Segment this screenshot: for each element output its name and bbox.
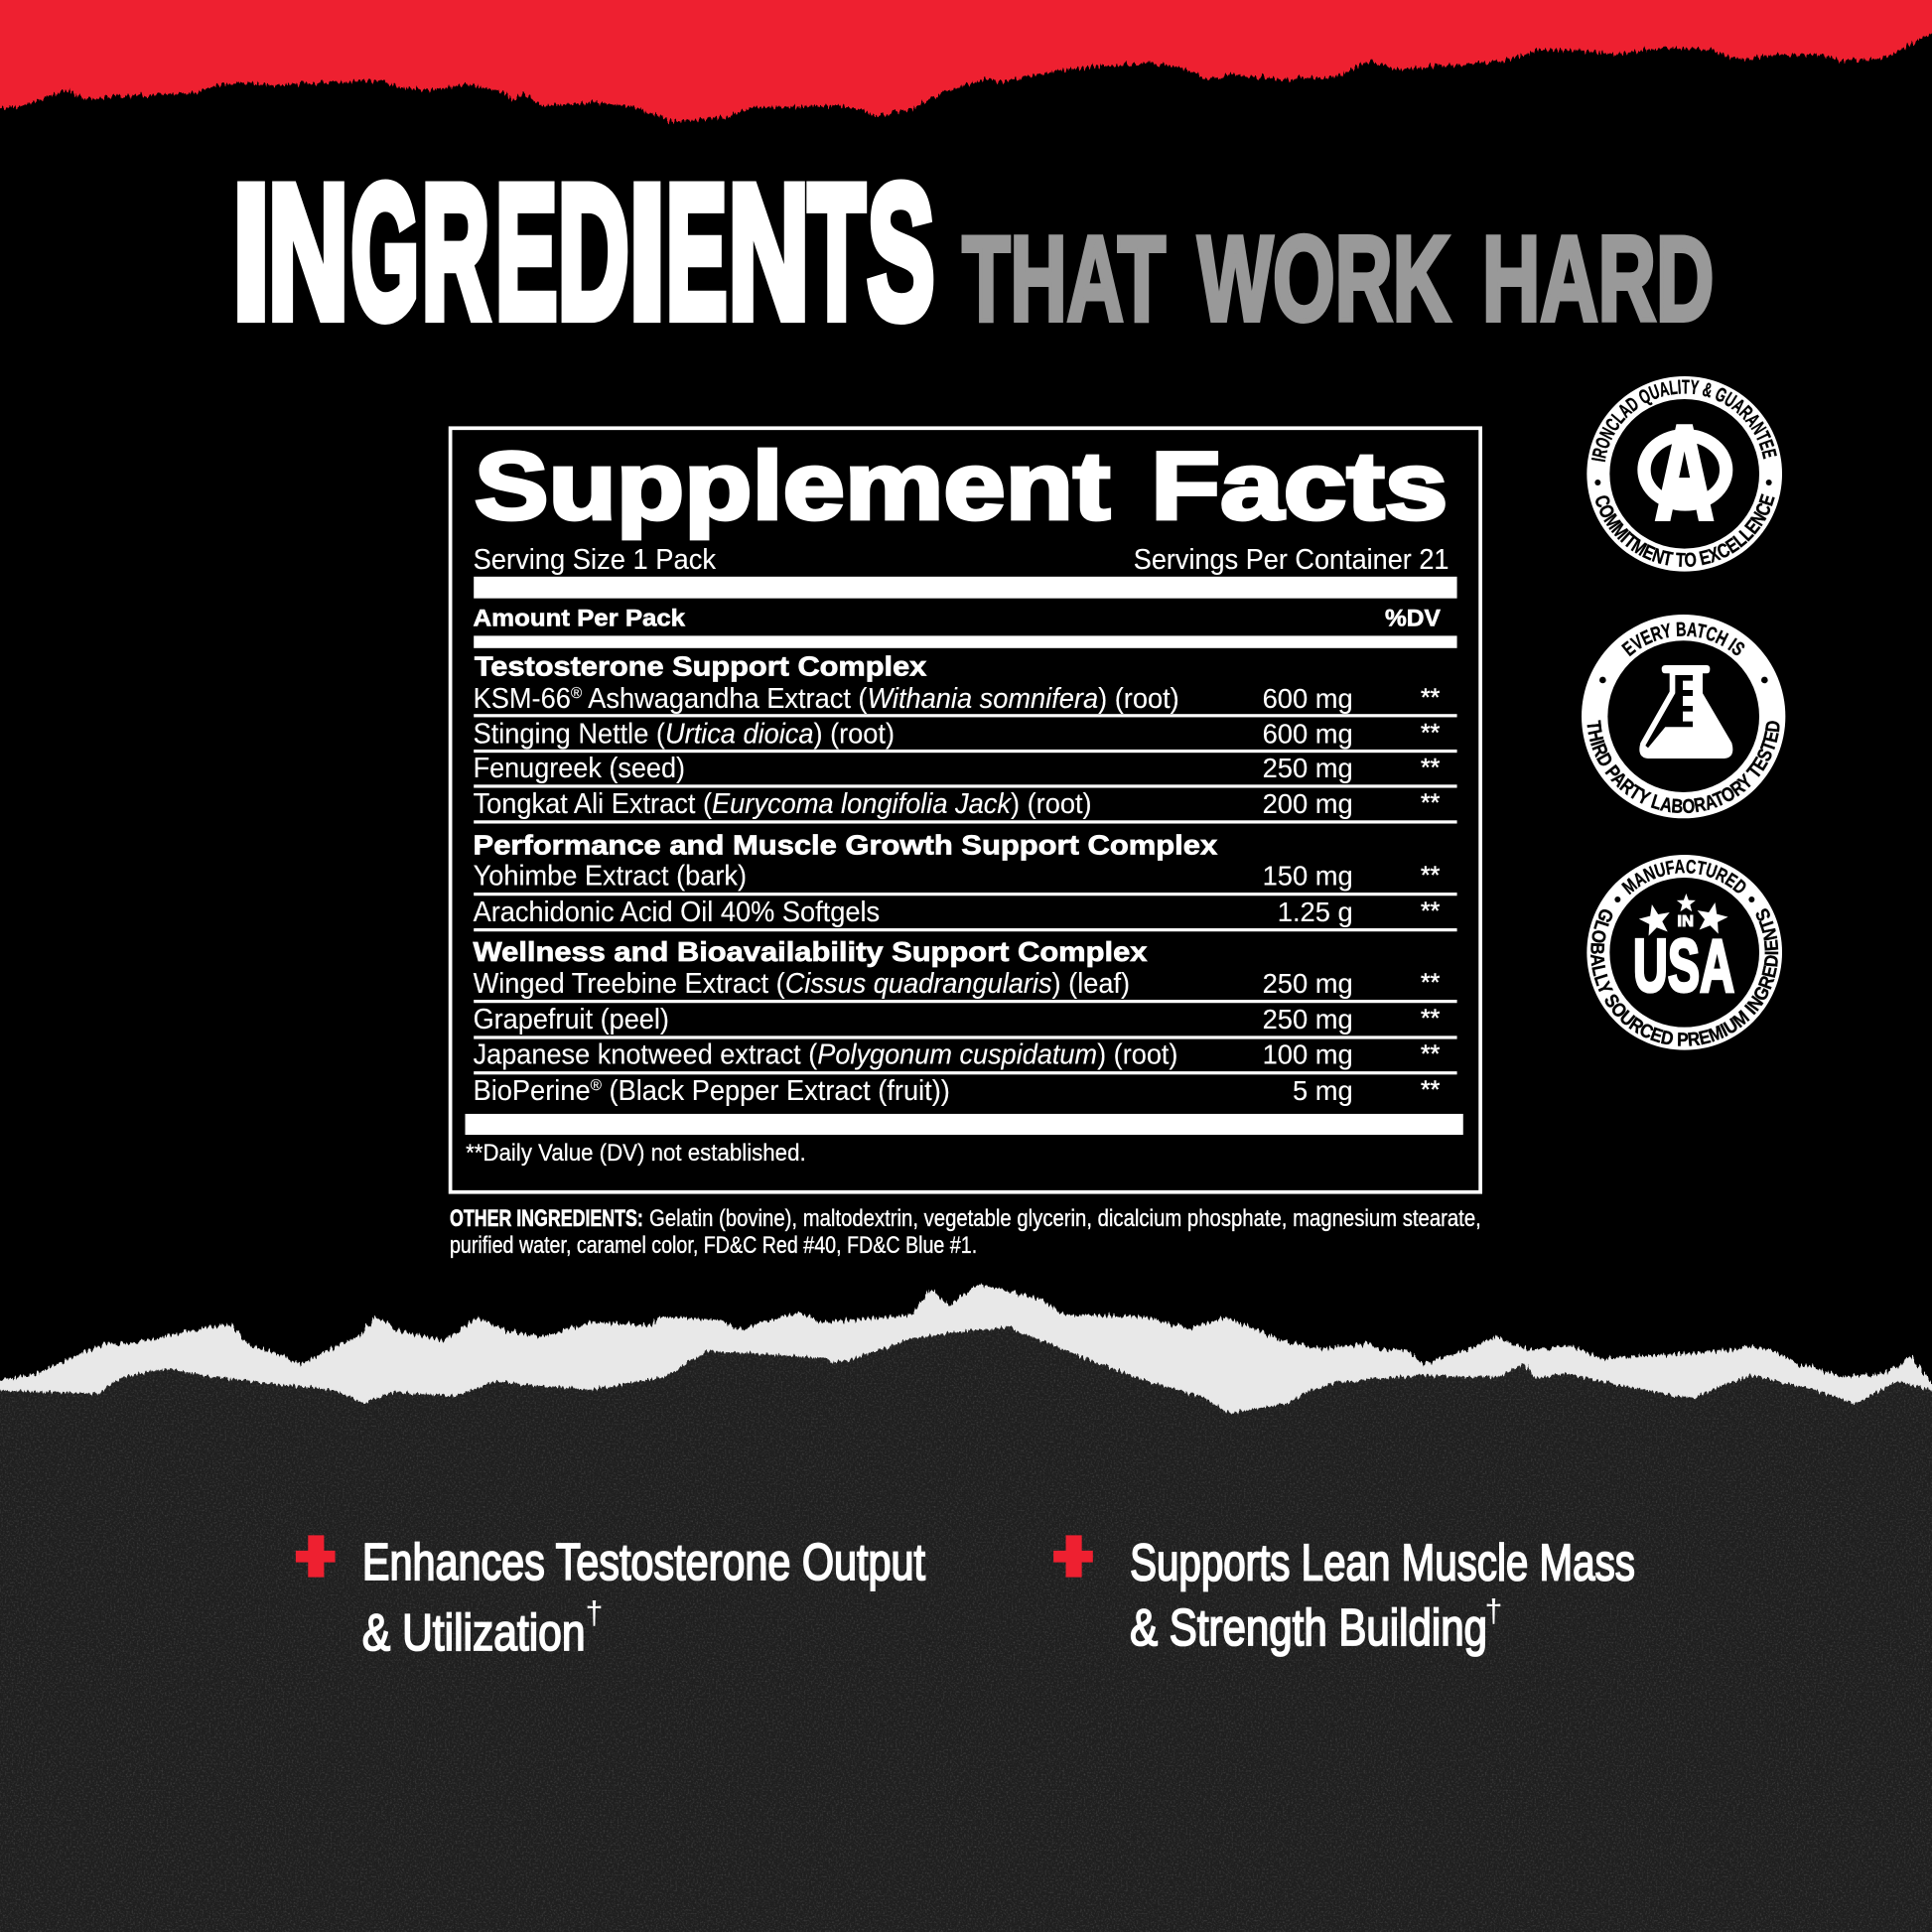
section: wellness and bioavailability support complex: Winged Treebine Extract (Cissus quadrangularis) (leaf) [474, 968, 1130, 1000]
section: wellness and bioavailability support complex: ® [591, 1076, 602, 1094]
section: performance and muscle growth support complex: Performance and Muscle Growth Support Complex [474, 830, 1217, 861]
panel title word: Supplement: Supplement [475, 431, 1110, 539]
icon: flask [1639, 665, 1732, 759]
icon: A logo with ring: A [1655, 399, 1714, 547]
section: testosterone support complex: 600 mg [1263, 683, 1353, 714]
heading word: WORK: WORK [1197, 211, 1450, 346]
heading word: INGREDIENTS: D [558, 146, 629, 358]
percent daily value header: %DV [1385, 605, 1441, 630]
section: performance and muscle growth support complex: ** [1421, 863, 1441, 890]
section: testosterone support complex: ** [1421, 755, 1441, 781]
panel: supplement facts [451, 428, 1480, 1192]
section: testosterone support complex: 600 mg [1263, 718, 1353, 749]
serving size: Serving Size 1 Pack [474, 544, 717, 576]
benefit: testosterone output: & Utilization [362, 1604, 586, 1662]
other ingredients text block: Gelatin (bovine), maltodextrin, vegetable glycerin, dicalcium phosphate, magnesium stearate, [649, 1205, 1481, 1231]
amount per pack header: Amount Per Pack [474, 605, 686, 630]
section: wellness and bioavailability support complex: (Black Pepper Extract (fruit)) [602, 1075, 950, 1107]
section: wellness and bioavailability support complex: 250 mg [1263, 1004, 1353, 1035]
torn red banner [0, 0, 1932, 122]
section: performance and muscle growth support complex: 1.25 g [1278, 897, 1353, 927]
heading: INGREDIENTS THAT WORK HARD [232, 146, 1714, 358]
section: testosterone support complex: 200 mg [1263, 788, 1353, 819]
panel frame [451, 428, 1480, 1192]
section: performance and muscle growth support complex: Arachidonic Acid Oil 40% Softgels [474, 897, 880, 928]
section: testosterone support complex: Withania somnifera) (root) [868, 683, 1183, 715]
benefit: testosterone output [296, 1534, 925, 1662]
icon: red cross [296, 1535, 336, 1578]
badge ring text top: MANUFACTURED [1621, 860, 1745, 896]
badge ring text top: IRONCLAD QUALITY & GUARANTEE [1590, 379, 1777, 463]
section: wellness and bioavailability support complex: BioPerine [474, 1075, 596, 1107]
heading word: INGREDIENTS: I [628, 146, 665, 358]
section: wellness and bioavailability support complex: Grapefruit (peel) [474, 1004, 669, 1035]
benefit: testosterone output: † [586, 1595, 603, 1631]
other ingredients text block: OTHER INGREDIENTS: [450, 1205, 643, 1231]
icon: stars [1636, 894, 1730, 937]
section: wellness and bioavailability support complex: 100 mg [1263, 1039, 1353, 1070]
label: USA: USA [1633, 923, 1734, 1007]
section: testosterone support complex: Ashwagandha Extract ( [582, 683, 868, 715]
footnote: **Daily Value (DV) not established. [466, 1140, 806, 1166]
section: performance and muscle growth support complex: ** [1421, 898, 1441, 925]
section: testosterone support complex: ® [571, 684, 582, 702]
label: IN: IN [1677, 913, 1694, 930]
heading word: INGREDIENTS: R [422, 146, 489, 358]
section: testosterone support complex [474, 651, 1457, 824]
section: wellness and bioavailability support complex: Japanese knotweed extract (Polygonum cuspidatum) (root) [474, 1039, 1177, 1071]
section: wellness and bioavailability support complex: ** [1421, 1077, 1441, 1104]
section: wellness and bioavailability support complex [474, 936, 1457, 1107]
benefit text: Supports Lean Muscle Mass [1130, 1535, 1635, 1592]
badge ring text bottom: GLOBALLY SOURCED PREMIUM INGREDIENTS [1590, 908, 1779, 1046]
heading word: INGREDIENTS: N [728, 146, 809, 358]
badge: every batch third party tested [1582, 615, 1785, 818]
section: performance and muscle growth support complex: 150 mg [1263, 861, 1353, 892]
heading word: INGREDIENTS: N [268, 146, 348, 358]
section: testosterone support complex: Fenugreek (seed) [474, 753, 685, 784]
section: wellness and bioavailability support complex: ** [1421, 1006, 1441, 1033]
section: performance and muscle growth support complex: Yohimbe Extract (bark) [474, 861, 747, 893]
icon: A logo with ring [1644, 399, 1726, 547]
benefit: lean muscle mass: † [1484, 1592, 1502, 1628]
heading word: INGREDIENTS: G [351, 146, 419, 358]
other ingredients text block [450, 1205, 1481, 1258]
panel title word: Facts: Facts [1151, 431, 1448, 539]
torn white paper strip [0, 1284, 1932, 1459]
benefit text: Enhances Testosterone Output [362, 1534, 925, 1591]
section: wellness and bioavailability support complex: 5 mg [1293, 1075, 1353, 1106]
section: wellness and bioavailability support complex: ** [1421, 970, 1441, 997]
heading word: INGREDIENTS: E [666, 146, 727, 358]
section: wellness and bioavailability support complex: Wellness and Bioavailability Support Complex [474, 936, 1147, 967]
servings per container: Servings Per Container 21 [1134, 544, 1449, 576]
heading word: INGREDIENTS: T [808, 146, 865, 358]
section: testosterone support complex: Testosterone Support Complex [475, 651, 926, 682]
section: testosterone support complex: Tongkat Ali Extract (Eurycoma longifolia Jack) (root) [474, 788, 1092, 820]
section: wellness and bioavailability support complex: ** [1421, 1041, 1441, 1068]
section: wellness and bioavailability support complex: 250 mg [1263, 968, 1353, 999]
heading word: INGREDIENTS: I [232, 146, 270, 358]
badge ring text bottom: COMMITMENT TO EXCELLENCE [1595, 493, 1775, 567]
other ingredients text block: purified water, caramel color, FD&C Red #40, FD&C Blue #1. [450, 1232, 977, 1258]
heading word: HARD: HARD [1482, 211, 1714, 346]
section: performance and muscle growth support complex [474, 830, 1457, 931]
heading word: INGREDIENTS: S [868, 146, 934, 358]
benefit: lean muscle mass [1053, 1535, 1635, 1657]
section: testosterone support complex: Stinging Nettle (Urtica dioica) (root) [474, 718, 895, 750]
badge ring text bottom: THIRD PARTY LABORATORY TESTED [1587, 720, 1780, 814]
section: testosterone support complex: KSM-66 [474, 683, 576, 715]
badge ring text top: EVERY BATCH IS [1621, 621, 1745, 657]
heading word: INGREDIENTS: E [495, 146, 557, 358]
section: testosterone support complex: ** [1421, 790, 1441, 817]
icon: red cross [1053, 1535, 1093, 1578]
heading word: THAT: THAT [962, 211, 1166, 346]
section: testosterone support complex: 250 mg [1263, 753, 1353, 783]
benefit: lean muscle mass: & Strength Building [1130, 1599, 1487, 1657]
section: testosterone support complex: ** [1421, 685, 1441, 712]
dark paper lower section [0, 1327, 1932, 1932]
badge: manufactured in USA [1587, 855, 1782, 1050]
badge: ironclad quality and guarantee [1587, 376, 1782, 572]
section: testosterone support complex: ** [1421, 721, 1441, 748]
